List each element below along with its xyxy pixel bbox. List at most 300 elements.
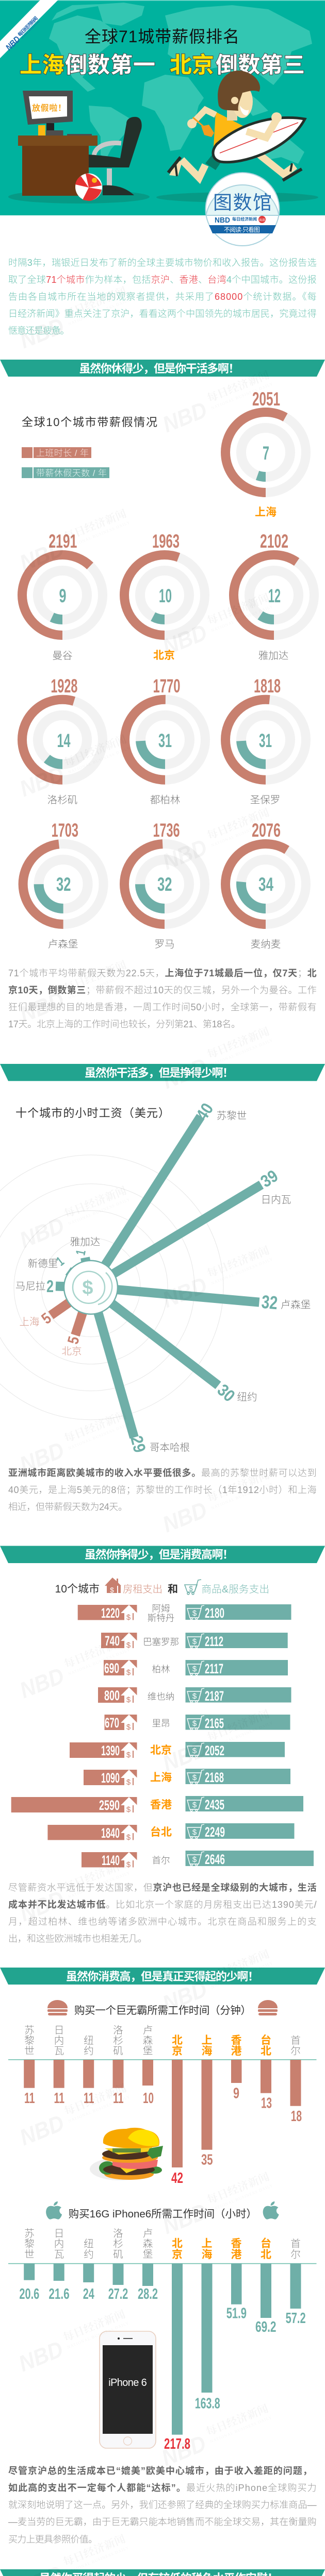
ring: 麦纳麦: 麦纳麦: [251, 939, 281, 950]
watermarks: 每日经济新闻: [62, 1184, 128, 1221]
watermarks: 每日经济新闻: [204, 2402, 270, 2438]
values: 1: [72, 1248, 89, 1257]
legend: 带薪休假天数 / 年: [36, 468, 107, 478]
subtitle: 北京: [170, 53, 214, 78]
city labels: 洛杉矶: [113, 2025, 123, 2057]
icon: house: $: [110, 1586, 114, 1594]
row: 首尔: 1140: [102, 1853, 120, 1868]
ring: 罗马: 罗马: [154, 939, 175, 950]
values: [38, 1099, 281, 1454]
text block: cost note: [8, 1882, 317, 1944]
text block: wage note: 40美元，是上海5美元的8倍；苏黎世的工作时长（1年1912小时）和上海: [8, 1485, 317, 1495]
watermarks: NATIONAL BUSINESS DAILY: [209, 2415, 272, 2444]
watermarks: NBD: [16, 1437, 68, 1478]
row: 里昂: 670: [105, 1715, 119, 1731]
row: 里昂: [104, 1715, 290, 1732]
values: 29: [127, 1434, 150, 1454]
chart title: rent and goods: 房租支出: [123, 1584, 163, 1595]
watermarks: NBD: [159, 1054, 210, 1094]
row: 台北: 1840: [101, 1825, 120, 1841]
values: 57.2: [286, 2310, 306, 2327]
row: 巴塞罗那: 2112: [205, 1634, 223, 1649]
values: 5: [38, 1310, 55, 1328]
text block: purchasing power note: 买力上更具参照价值。: [8, 2534, 98, 2545]
heading: section 3: [0, 1546, 325, 1563]
values: 13: [261, 2095, 272, 2112]
icon: apple left: [46, 2201, 62, 2219]
icon: apple right: [263, 2201, 279, 2219]
row: 北京: 2052: [205, 1743, 224, 1758]
row: 维也纳: 2187: [205, 1688, 224, 1704]
watermarks: NBD: [159, 1497, 210, 1537]
row: 台北: $: [192, 1828, 197, 1837]
heading: section 1: 虽然你休得少，但是你干活多啊！: [79, 362, 239, 375]
watermarks: NBD: [159, 835, 210, 875]
row: 上海: 2168: [205, 1770, 224, 1785]
desk scene: [8, 91, 318, 204]
row: 柏林: 柏林: [152, 1664, 170, 1674]
radial chart: hourly wage: [0, 1099, 311, 1454]
city labels: 台北: [261, 2034, 271, 2057]
NBD corner ribbon: NBD: [4, 34, 22, 53]
watermarks: NBD: [159, 1736, 210, 1776]
ring: 洛杉矶: [22, 675, 103, 806]
subtitle: [20, 53, 305, 78]
row: 上海: 1090: [101, 1770, 120, 1786]
watermarks: NATIONAL BUSINESS DAILY: [68, 2094, 131, 2124]
city labels: 卢森堡: [143, 2025, 153, 2057]
text block: wage note: [8, 1467, 317, 1512]
bars: [24, 2264, 301, 2435]
badge: 图数馆: NBD: [215, 216, 230, 225]
watermarks: NBD: [16, 536, 68, 576]
text block: intro: 惬意还是疲惫。: [8, 326, 70, 336]
watermarks: NBD: [159, 620, 210, 660]
watermarks: 每日经济新闻: [62, 1409, 128, 1445]
text block: purchasing power note: 如此高的支出不一定每个人都能“达标”。最近火热的iPhone全球购买力: [8, 2482, 317, 2493]
ring: 曼谷: 2191: [48, 531, 77, 552]
text block: intro: 告由各自城市所在当地的观察者提供，共采用了68000个统计数据。《每: [8, 292, 317, 302]
watermarks: NATIONAL BUSINESS DAILY: [67, 2545, 129, 2574]
ring: 雅加达: 2102: [260, 531, 288, 552]
heading: section 5: [0, 2569, 325, 2576]
row: 里昂: 里昂: [152, 1718, 170, 1728]
row: 首尔: 2646: [205, 1852, 225, 1867]
watermarks: NATIONAL BUSINESS DAILY: [210, 1720, 273, 1750]
ring: 上海: [225, 388, 306, 518]
watermarks: NBD: [159, 1273, 210, 1313]
watermarks: NBD: [16, 1213, 68, 1253]
row: 维也纳: 维也纳: [148, 1691, 174, 1702]
values: 51.9: [226, 2305, 247, 2321]
row: 维也纳: $: [192, 1692, 197, 1701]
watermarks: NATIONAL BUSINESS DAILY: [68, 971, 131, 1001]
ring: 上海: 7: [263, 443, 269, 464]
chart title: rent and goods: [55, 1578, 269, 1595]
city labels: 哥本哈根: [150, 1442, 190, 1453]
text block: intro: 时隔3年，瑞银近日发布了新的全球主要城市物价和收入报告。这份报告选: [8, 258, 317, 268]
bars: [51, 1116, 261, 1437]
text block: purchasing power note: 尽管京沪总的生活成本已“媲美”欧美中心城市，由于收入差距的问题，: [8, 2465, 312, 2476]
city labels: 洛杉矶: [113, 2228, 123, 2260]
city labels: 首尔: [290, 2035, 301, 2057]
watermarks: NBD: [15, 2336, 67, 2377]
watermarks: NATIONAL BUSINESS DAILY: [68, 745, 131, 775]
badge: 图数馆: 每日经济新闻: [232, 216, 257, 222]
row: 阿姆斯特丹: $: [126, 1613, 131, 1622]
row: 上海: [84, 1769, 290, 1787]
watermarks: NBD: [16, 761, 68, 802]
watermarks: NBD: [16, 313, 68, 353]
icon: dollar coin: $: [82, 1277, 93, 1299]
chart heading: Big Mac: [47, 2000, 278, 2016]
row: 维也纳: $: [126, 1696, 131, 1704]
ring: 卢森堡: 1703: [52, 820, 78, 841]
row: 香港: 2590: [99, 1798, 120, 1813]
chart title: paid leave: 全球10个城市带薪假情况: [22, 416, 157, 429]
row: 上海: 上海: [150, 1772, 172, 1784]
ring: 洛杉矶: 1928: [51, 675, 77, 697]
ring: 圣保罗: 1818: [254, 675, 281, 697]
row: 台北: 台北: [150, 1826, 172, 1838]
watermarks: 每日经济新闻: [205, 591, 271, 628]
city labels: [15, 1110, 311, 1453]
city labels: 苏黎世: [24, 2025, 35, 2057]
ring: 雅加达: [234, 531, 314, 662]
watermarks: 每日经济新闻: [205, 1947, 271, 1984]
watermarks: NATIONAL BUSINESS DAILY: [68, 1870, 131, 1900]
watermarks: [14, 284, 277, 2576]
row: 阿姆斯特丹: 斯特丹: [148, 1613, 174, 1623]
ring: 北京: 10: [159, 585, 172, 606]
text block: purchasing power note: [8, 2465, 317, 2545]
row: 巴塞罗那: 巴塞罗那: [143, 1637, 179, 1647]
text block: purchasing power note: 就深刻地说明了这一点。另外，我们还参照了经典的全球购买力标准商品—: [8, 2500, 317, 2510]
row: 香港: 香港: [150, 1799, 172, 1811]
city labels: 苏黎世: [217, 1110, 247, 1122]
row: 巴塞罗那: [101, 1633, 288, 1650]
watermarks: 每日经济新闻: [205, 1468, 271, 1505]
row: 巴塞罗那: 740: [105, 1633, 120, 1649]
values: 40: [192, 1099, 217, 1124]
ring: 麦纳麦: [225, 820, 306, 950]
badge: 图数馆: 图数馆: [213, 192, 272, 213]
text block: wage note: 相近，但带薪假天数为24天。: [8, 1502, 127, 1512]
chart title: rent and goods: 和: [168, 1583, 178, 1595]
row: 柏林: 2117: [205, 1661, 223, 1676]
city labels: 北京: [61, 1346, 82, 1357]
icon: iPhone 6: [100, 2331, 156, 2448]
row: 阿姆斯特丹: 2180: [205, 1605, 224, 1621]
row: 首尔: $: [192, 1855, 197, 1864]
row: 上海: $: [192, 1773, 197, 1782]
watermarks: NATIONAL BUSINESS DAILY: [210, 1038, 273, 1067]
values: 11: [54, 2090, 64, 2107]
values: 30: [214, 1380, 239, 1405]
ring: 都柏林: 31: [158, 730, 172, 751]
row: 里昂: $: [192, 1719, 197, 1728]
badge: 图数馆: 出品: [259, 218, 265, 222]
icon: burger left: [47, 2000, 68, 2015]
heading: section 3: 虽然你挣得少，但是消费高啊！: [85, 1548, 234, 1561]
icon: cart: [185, 1580, 201, 1595]
row: 柏林: $: [126, 1668, 131, 1677]
city labels: 首尔: [290, 2238, 301, 2260]
values: 11: [24, 2090, 35, 2107]
ring: 上海: 上海: [255, 506, 277, 518]
values: 69.2: [255, 2319, 277, 2335]
legend: [22, 447, 109, 478]
ring: 曼谷: [22, 531, 103, 662]
row: 阿姆斯特丹: [78, 1603, 291, 1623]
city labels: 香港: [231, 2238, 241, 2261]
watermarks: 每日经济新闻: [205, 2170, 271, 2207]
panel: header illustration: [0, 0, 325, 246]
city labels: 卢森堡: [281, 1299, 311, 1311]
values: 5: [64, 1335, 83, 1346]
watermarks: 每日经济新闻: [62, 507, 128, 544]
watermarks: 每日经济新闻: [205, 1707, 271, 1744]
watermarks: 每日经济新闻: [62, 2081, 128, 2118]
watermarks: NATIONAL BUSINESS DAILY: [67, 2320, 129, 2350]
text block: intro: [8, 258, 317, 336]
heading: section 2: 虽然你干活多，但是挣得少啊！: [85, 1066, 234, 1079]
chart heading: iPhone: 购买16G iPhone6所需工作时间（小时）: [69, 2208, 257, 2220]
city labels: 纽约: [84, 2238, 94, 2260]
bar chart: rent and goods: [11, 1603, 314, 1869]
running man with surfboard: [168, 71, 305, 180]
values: 32: [261, 1291, 279, 1313]
watermarks: NBD: [16, 1663, 68, 1703]
watermarks: 每日经济新闻: [205, 1244, 271, 1280]
city labels: 北京: [172, 2035, 183, 2057]
bars: [24, 2060, 301, 2167]
watermarks: 每日经济新闻: [61, 2532, 127, 2569]
text block: purchasing power note: —麦当劳的巨无霸，由于巨无霸只能本地销售而不能全球交易，其在衡量购: [8, 2517, 317, 2527]
text block: cost note: 成本并不比发达城市低。比如北京一个家庭的月房租支出已达1390美元/: [8, 1899, 317, 1910]
row: 巴塞罗那: $: [126, 1641, 131, 1650]
row: 维也纳: 800: [104, 1688, 120, 1703]
city labels: 台北: [261, 2237, 271, 2261]
row: 台北: $: [126, 1833, 131, 1842]
ring: 罗马: 32: [157, 874, 172, 895]
ring: 都柏林: 1770: [153, 675, 181, 697]
row: 北京: [70, 1742, 285, 1759]
watermarks: 每日经济新闻: [61, 2308, 127, 2344]
city labels: 上海: [19, 1316, 40, 1328]
watermarks: 每日经济新闻: [205, 806, 271, 842]
values: 20.6: [19, 2286, 39, 2302]
row: 柏林: [104, 1660, 288, 1677]
watermarks: 每日经济新闻: [205, 368, 271, 405]
heading: section 4: 虽然你消费高，但是真正买得起的少啊！: [66, 1970, 259, 1983]
watermarks: 每日经济新闻: [62, 958, 128, 995]
values: 21.6: [48, 2286, 70, 2302]
values: 42: [171, 2170, 183, 2187]
row: 阿姆斯特丹: $: [192, 1609, 197, 1618]
ring: 上海: 2051: [252, 388, 280, 410]
ring: 罗马: 1736: [153, 820, 180, 841]
chart title: rent and goods: 10个城市: [55, 1583, 100, 1595]
row: 香港: $: [192, 1801, 197, 1809]
chart title: rent and goods: 商品&服务支出: [201, 1584, 269, 1595]
ring: 北京: 1963: [152, 531, 180, 552]
icon: cart: $: [189, 1584, 193, 1592]
chart title: hourly wage: 十个城市的小时工资（美元）: [15, 1107, 170, 1120]
values: 2: [46, 1277, 54, 1296]
row: 台北: 2249: [205, 1824, 225, 1840]
watermarks: NATIONAL BUSINESS DAILY: [210, 2183, 273, 2212]
desk scene: 放假啦！: [32, 103, 66, 113]
text block: paid leave note: 71个城市平均带薪假天数为22.5天，上海位于71城最后一位，仅7天；北: [8, 968, 317, 978]
title: 全球71城带薪假排名: [85, 27, 239, 46]
row: 台北: [47, 1823, 295, 1842]
bar chart: Big Mac minutes: [8, 2025, 317, 2187]
row: 阿姆斯特丹: 1220: [101, 1605, 120, 1621]
chart heading: iPhone: [46, 2201, 279, 2220]
values: 39: [257, 1166, 281, 1191]
NBD corner ribbon: 每日经济新闻: [17, 15, 39, 38]
row: 柏林: $: [192, 1665, 197, 1673]
values: 24: [83, 2286, 94, 2302]
row: 香港: 2435: [205, 1797, 224, 1812]
values: 11: [84, 2090, 94, 2107]
text block: paid leave note: 狂们最理想的目的地是香港，一周工作时间50小时，全球第一，带薪假有: [8, 1002, 317, 1012]
city labels: [24, 2025, 301, 2057]
city labels: 香港: [231, 2035, 241, 2057]
heading: section 1: [0, 360, 325, 377]
watermarks: 每日经济新闻: [62, 733, 128, 769]
subtitle: 倒数第一: [65, 53, 155, 78]
watermarks: NATIONAL BUSINESS DAILY: [210, 819, 273, 848]
row: 巴塞罗那: $: [192, 1637, 197, 1646]
watermarks: 每日经济新闻: [205, 1025, 271, 1061]
ring: 圣保罗: [225, 675, 306, 806]
ring: 卢森堡: 32: [56, 874, 71, 895]
ring: 麦纳麦: 2076: [252, 820, 281, 841]
watermarks: NBD: [16, 2110, 68, 2150]
NBD corner ribbon: NATIONAL BUSINESS DAILY: [21, 19, 41, 39]
ring: 北京: [124, 531, 205, 662]
watermarks: NBD: [159, 1976, 210, 2016]
world map: [49, 3, 312, 164]
ring: 曼谷: 曼谷: [52, 650, 73, 662]
text block: paid leave note: 17天。北京上海的工作时间也较长，分列第21、第18名。: [8, 1019, 240, 1029]
watermarks: NATIONAL BUSINESS DAILY: [68, 1647, 131, 1676]
text block: intro: 取了全球71个城市作为样本，包括京沪、香港、台湾4个中国城市。这份报: [8, 275, 317, 285]
values: 9: [233, 2086, 239, 2102]
watermarks: NBD: [16, 1886, 68, 1926]
city labels: 苏黎世: [24, 2228, 35, 2260]
icon: dollar coin: [64, 1261, 118, 1314]
row: 阿姆斯特丹: 阿姆: [152, 1603, 170, 1614]
text block: cost note: 出，和这些欧洲城市也相差无几。: [8, 1934, 147, 1944]
watermarks: NATIONAL BUSINESS DAILY: [210, 604, 273, 633]
ring: 曼谷: 9: [59, 585, 66, 606]
ring: 麦纳麦: 34: [258, 874, 273, 895]
heading: section 4: [0, 1968, 325, 1985]
city labels: 新德里: [28, 1258, 58, 1269]
ring: 洛杉矶: 洛杉矶: [47, 794, 77, 806]
watermarks: NATIONAL BUSINESS DAILY: [68, 1421, 131, 1451]
heading: section 2: [0, 1064, 325, 1081]
row: 北京: $: [126, 1751, 131, 1759]
text block: cost note: 尽管薪资水平远低于发达国家，但京沪也已经是全球级别的大城市，生活: [8, 1882, 317, 1893]
watermarks: 每日经济新闻: [62, 284, 128, 321]
watermarks: NATIONAL BUSINESS DAILY: [68, 520, 131, 549]
city labels: [24, 2228, 301, 2261]
ring: 北京: 北京: [153, 649, 175, 662]
values: 35: [201, 2152, 213, 2168]
watermarks: 每日经济新闻: [62, 1857, 128, 1894]
watermarks: NBD: [159, 2199, 210, 2239]
city labels: 纽约: [84, 2035, 94, 2057]
city labels: 日内瓦: [261, 1194, 291, 1206]
row: 北京: 1390: [101, 1743, 120, 1758]
ring: 都柏林: 都柏林: [150, 794, 180, 806]
values: 27.2: [108, 2286, 128, 2302]
ring: 卢森堡: 卢森堡: [48, 939, 78, 950]
badge: 图数馆: [205, 173, 280, 246]
values: 1: [53, 1253, 67, 1269]
ring: 圣保罗: 31: [259, 730, 272, 751]
row: 北京: 北京: [150, 1744, 172, 1756]
bar chart: iPhone hours: [8, 2228, 317, 2452]
city labels: 马尼拉: [15, 1281, 45, 1292]
watermarks: NATIONAL BUSINESS DAILY: [210, 1257, 273, 1286]
row: 香港: $: [126, 1805, 131, 1814]
values: [24, 2086, 302, 2187]
row: 首尔: 首尔: [152, 1855, 170, 1866]
legend: 上班时长 / 年: [36, 448, 89, 458]
values: 28.2: [138, 2286, 158, 2302]
city labels: 纽约: [237, 1392, 257, 1403]
watermarks: NBD: [158, 2431, 209, 2471]
watermarks: NATIONAL BUSINESS DAILY: [68, 1197, 131, 1226]
watermarks: NATIONAL BUSINESS DAILY: [210, 1481, 273, 1511]
ring: 罗马: [124, 820, 205, 950]
ring: 都柏林: [125, 675, 205, 806]
watermarks: NATIONAL BUSINESS DAILY: [210, 381, 273, 411]
ring: 雅加达: 12: [268, 585, 281, 606]
NBD corner ribbon: [0, 0, 58, 58]
values: 11: [113, 2090, 124, 2107]
city labels: 北京: [172, 2238, 183, 2261]
watermarks: NBD: [159, 397, 210, 437]
text block: paid leave note: [8, 968, 317, 1029]
city labels: 卢森堡: [143, 2228, 153, 2260]
city labels: 上海: [201, 2238, 213, 2261]
row: 里昂: 2165: [205, 1716, 224, 1731]
values: 163.8: [195, 2396, 220, 2412]
row: 首尔: $: [126, 1860, 131, 1869]
watermarks: NATIONAL BUSINESS DAILY: [210, 1960, 273, 1990]
row: 首尔: [82, 1851, 314, 1869]
row: 柏林: 690: [104, 1660, 119, 1676]
icon: burger illustration: [90, 2128, 163, 2180]
row: 北京: $: [192, 1747, 197, 1755]
watermarks: 每日经济新闻: [62, 1634, 128, 1671]
watermarks: NATIONAL BUSINESS DAILY: [68, 297, 131, 327]
badge: 图数馆: 不阅读·只看图: [224, 226, 260, 233]
row: 上海: $: [126, 1778, 131, 1787]
values: 217.8: [164, 2436, 190, 2452]
text block: cost note: 月，超过柏林、维也纳等诸多欧洲中心城市。北京在商品和服务上的支: [8, 1917, 317, 1927]
chart heading: Big Mac: 购买一个巨无霸所需工作时间（分钟）: [74, 2005, 251, 2016]
values: 10: [143, 2090, 154, 2107]
city labels: 上海: [201, 2035, 213, 2057]
subtitle: 上海: [20, 53, 64, 78]
